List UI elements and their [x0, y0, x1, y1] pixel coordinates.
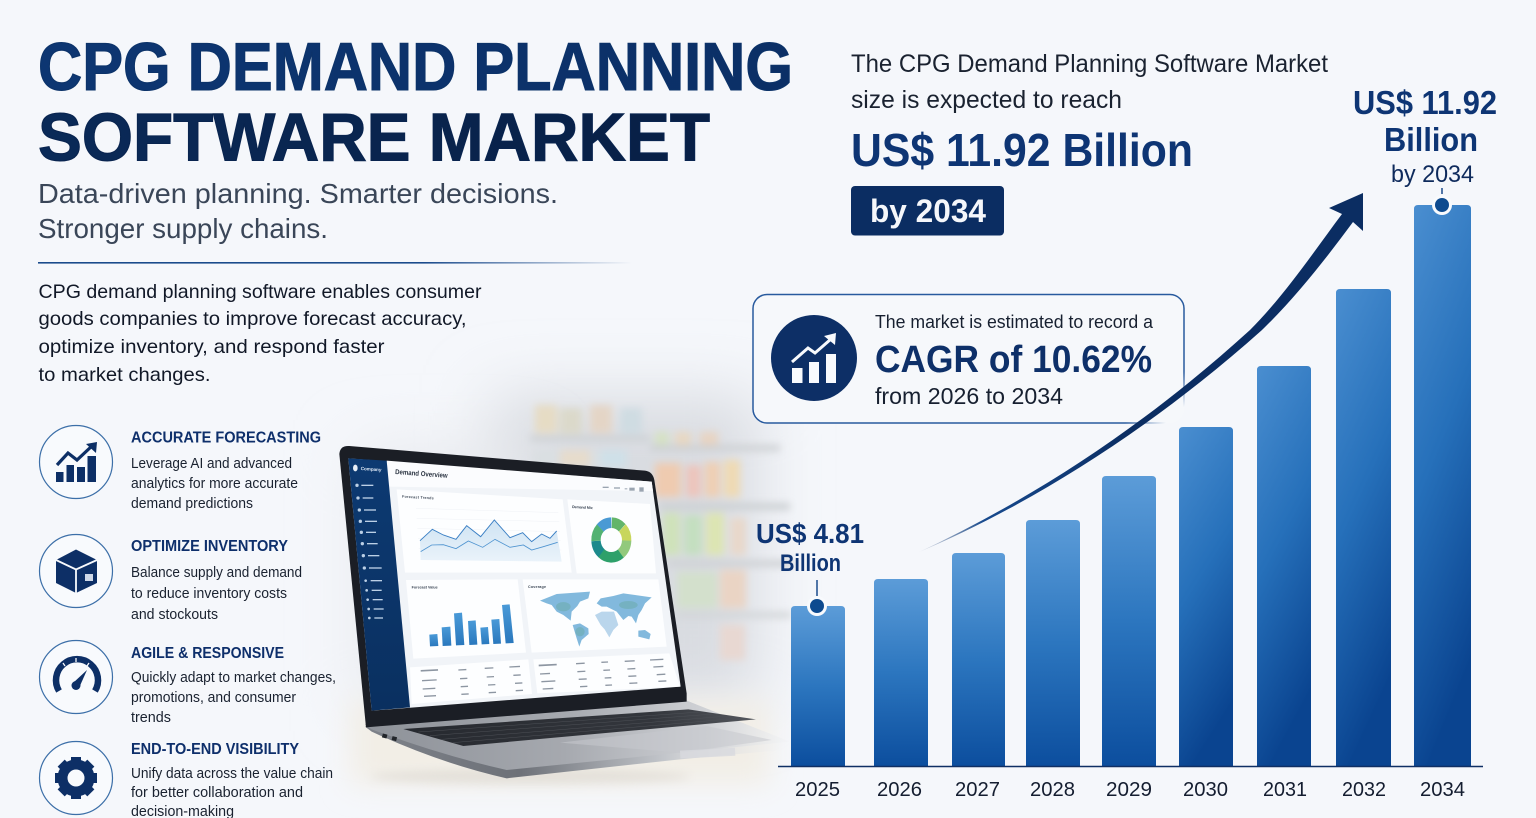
- subtitle: Stronger supply chains.: [38, 213, 328, 244]
- by 2034 badge: [851, 186, 1004, 236]
- by 2034 badge: by 2034: [870, 193, 986, 229]
- world map card: [523, 579, 667, 653]
- title: [38, 29, 793, 176]
- laptop lid: [339, 446, 687, 727]
- intro paragraph: [38, 281, 482, 386]
- feature: optimize inventory: to reduce inventory costs: [131, 586, 287, 602]
- title: CPG DEMAND PLANNING: [38, 29, 793, 105]
- blurred supermarket shelves backdrop: [350, 395, 793, 785]
- laptop base: [365, 701, 790, 778]
- start value marker 2025: US$ 4.81: [756, 518, 864, 549]
- feature: accurate forecasting: analytics for more accurate: [131, 476, 298, 492]
- feature: end-to-end visibility: for better collaboration and: [131, 785, 303, 801]
- intro paragraph: to market changes.: [38, 364, 210, 386]
- donut chart card: [567, 499, 656, 573]
- market size callout: [851, 50, 1328, 236]
- bar 2031: [1257, 366, 1311, 766]
- screen heading: Demand Overview: [395, 469, 448, 480]
- CAGR callout panel: [753, 294, 1184, 423]
- icon: package box: [56, 550, 97, 593]
- feature: optimize inventory: and stockouts: [131, 607, 218, 623]
- feature: agile and responsive: trends: [131, 710, 171, 726]
- CAGR callout panel: CAGR of 10.62%: [875, 339, 1152, 381]
- bar 2026: [874, 579, 928, 766]
- bar chart card: [406, 579, 526, 659]
- feature: optimize inventory: OPTIMIZE INVENTORY: [131, 538, 288, 555]
- year axis labels: [795, 778, 1465, 801]
- feature: agile and responsive: promotions, and consumer: [131, 690, 296, 706]
- sidebar: Company: [361, 466, 382, 472]
- icon: gear: [55, 757, 97, 799]
- feature: agile and responsive: Quickly adapt to market changes,: [131, 670, 336, 686]
- bar 2028: [1026, 520, 1080, 766]
- sidebar: [348, 458, 410, 711]
- feature: end-to-end visibility: Unify data across the value chain: [131, 766, 333, 782]
- world map card: Coverage: [528, 585, 546, 589]
- bar chart: market size 2025 to 2034: [778, 205, 1483, 801]
- end value marker 2034: US$ 11.92: [1353, 84, 1497, 121]
- line chart card: Forecast Trends: [402, 495, 434, 500]
- year axis labels: 2029: [1106, 778, 1152, 801]
- intro paragraph: goods companies to improve forecast accuracy,: [38, 308, 466, 330]
- feature: optimize inventory: [40, 534, 302, 623]
- bar 2029: [1102, 476, 1156, 766]
- bar 2030: [1179, 427, 1233, 766]
- end value marker 2034: Billion: [1384, 121, 1478, 158]
- year axis labels: 2034: [1420, 778, 1465, 801]
- laptop shadow: [370, 769, 690, 785]
- year axis labels: 2032: [1342, 778, 1386, 801]
- feature: accurate forecasting: [40, 426, 321, 512]
- icon: growth chart in circle: [771, 315, 857, 401]
- growth arrow: [917, 193, 1363, 553]
- start value marker 2025: [756, 518, 864, 616]
- feature: end-to-end visibility: END-TO-END VISIBILITY: [131, 741, 299, 758]
- CAGR callout panel: from 2026 to 2034: [875, 383, 1063, 409]
- bar chart card: Forecast Value: [412, 586, 438, 590]
- end value marker 2034: [1353, 84, 1497, 215]
- intro paragraph: CPG demand planning software enables consumer: [38, 281, 482, 303]
- CAGR callout panel: The market is estimated to record a: [875, 311, 1154, 332]
- bar 2032: [1336, 289, 1391, 766]
- feature: accurate forecasting: ACCURATE FORECASTING: [131, 430, 321, 446]
- feature: end-to-end visibility: [40, 741, 333, 818]
- feature: accurate forecasting: demand predictions: [131, 496, 253, 512]
- feature: optimize inventory: Balance supply and demand: [131, 565, 302, 581]
- year axis labels: 2026: [877, 778, 922, 801]
- title: SOFTWARE MARKET: [38, 100, 710, 176]
- icon: speedometer: [56, 658, 98, 691]
- dashboard screen: [348, 458, 681, 711]
- market size callout: size is expected to reach: [851, 86, 1122, 114]
- bar 2027: [952, 553, 1005, 766]
- market size callout: US$ 11.92 Billion: [851, 124, 1193, 176]
- data tables: [410, 653, 680, 704]
- year axis labels: 2030: [1183, 778, 1228, 801]
- line chart card: [397, 489, 572, 573]
- feature: agile and responsive: [40, 640, 336, 726]
- feature: accurate forecasting: Leverage AI and advanced: [131, 456, 292, 472]
- bar 2025: [791, 606, 845, 766]
- year axis labels: 2031: [1263, 778, 1307, 801]
- laptop showing demand dashboard: [339, 446, 790, 785]
- market size callout: The CPG Demand Planning Software Market: [851, 50, 1328, 78]
- year axis labels: 2028: [1030, 778, 1075, 801]
- donut chart card: Demand Mix: [572, 505, 593, 510]
- year axis labels: 2025: [795, 778, 840, 801]
- subtitle: Data-driven planning. Smarter decisions.: [38, 178, 558, 209]
- subtitle: [38, 178, 558, 244]
- intro paragraph: optimize inventory, and respond faster: [38, 336, 385, 358]
- bar 2034: [1414, 205, 1471, 766]
- icon: rising bar chart: [56, 442, 97, 482]
- feature: agile and responsive: AGILE & RESPONSIVE: [131, 645, 284, 662]
- end value marker 2034: by 2034: [1391, 161, 1474, 188]
- start value marker 2025: Billion: [780, 550, 841, 577]
- year axis labels: 2027: [955, 778, 1000, 801]
